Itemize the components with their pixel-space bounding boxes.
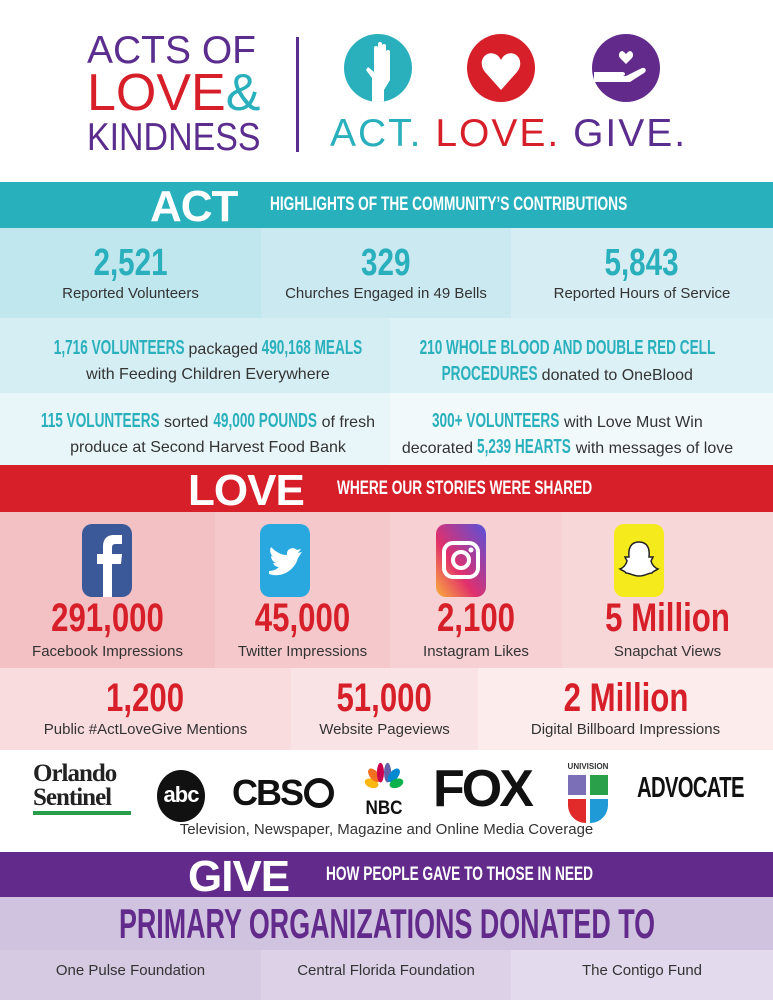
logo: cbs: [232, 772, 334, 813]
divider: [296, 37, 299, 152]
stat: facebook: [0, 512, 215, 668]
GIVE heading: [0, 897, 773, 950]
organizations: [0, 950, 773, 1000]
GIVE bar: HOW PEOPLE GAVE TO THOSE IN NEED: [326, 864, 593, 885]
stat: volunteers: [0, 228, 261, 318]
stat: snapchat: 5 Million: [605, 596, 730, 640]
stat: facebook: Facebook Impressions: [32, 643, 183, 660]
highlight: hearts: [402, 410, 733, 458]
stat: pageviews: Website Pageviews: [319, 721, 450, 738]
highlight: produce: produce at Second Harvest Food Bank: [70, 439, 346, 456]
stat: twitter: Twitter Impressions: [238, 643, 367, 660]
ACT bar: ACT: [150, 182, 237, 231]
highlight: meals: 1,716 VOLUNTEERS: [54, 337, 184, 359]
logo: orlando sentinel: [33, 762, 131, 815]
tagline: ACT. LOVE. GIVE.: [330, 112, 687, 155]
stat: hours: [511, 228, 773, 318]
org: central florida: Central Florida Foundation: [297, 962, 475, 979]
icon: facebook: [82, 524, 132, 597]
highlight: hearts: decorated with messages of love: [402, 440, 733, 457]
LOVE second row: [0, 668, 773, 750]
stat: mentions: [0, 668, 291, 750]
logo: orlando sentinel: Sentinel: [33, 784, 111, 811]
icon: heart (love): [467, 34, 535, 102]
LOVE bar: LOVE: [188, 466, 304, 515]
stat: instagram: [390, 512, 562, 668]
logo: nbc: NBC: [365, 798, 403, 819]
highlight: produce: 49,000 POUNDS: [213, 410, 317, 432]
header logo text: [87, 29, 260, 159]
icon: twitter: [260, 524, 310, 597]
LOVE bar: [0, 465, 773, 512]
media caption: Television, Newspaper, Magazine and Online Media Coverage: [180, 821, 593, 838]
highlight: produce: sorted of fresh: [164, 414, 375, 431]
logo: abc: abc: [164, 782, 198, 807]
stat: instagram: Instagram Likes: [423, 643, 529, 660]
logo: univision: [568, 762, 608, 823]
highlight: blood: PROCEDURES: [442, 363, 538, 385]
icon: hand (act): [344, 34, 412, 102]
icon: snapchat: [614, 524, 664, 597]
social row: [0, 512, 773, 668]
header logo text: LOVE&: [87, 64, 260, 122]
highlight: produce: [41, 410, 375, 456]
highlight: produce: 115 VOLUNTEERS: [41, 410, 160, 432]
logo: cbs: CBS: [232, 772, 302, 813]
stat: hours: 5,843: [605, 242, 679, 284]
stat: mentions: 1,200: [106, 676, 185, 720]
logo: univision: UNIVISION: [568, 762, 608, 771]
org: contigo: [511, 950, 773, 1000]
org: one pulse: [0, 950, 261, 1000]
media logos: [33, 760, 744, 838]
logo: nbc: [364, 762, 404, 819]
stat: billboard: Digital Billboard Impressions: [531, 721, 720, 738]
stat: volunteers: Reported Volunteers: [62, 285, 199, 302]
stat: pageviews: [291, 668, 478, 750]
LOVE bar: WHERE OUR STORIES WERE SHARED: [337, 478, 592, 499]
stat: churches: 329: [361, 242, 411, 284]
highlight: blood: donated to OneBlood: [542, 367, 693, 384]
GIVE bar: [0, 852, 773, 897]
highlight: meals: 490,168 MEALS: [262, 337, 363, 359]
stat: instagram: 2,100: [437, 596, 515, 640]
stat: churches: [261, 228, 511, 318]
stat: twitter: 45,000: [255, 596, 350, 640]
logo: abc: [157, 770, 205, 822]
org: one pulse: One Pulse Foundation: [56, 962, 205, 979]
GIVE heading: PRIMARY ORGANIZATIONS DONATED TO: [119, 900, 655, 947]
ACT highlights: [0, 318, 773, 465]
logo: orlando sentinel: Orlando: [33, 760, 116, 787]
GIVE bar: GIVE: [188, 852, 289, 901]
ACT stats row: [0, 228, 773, 318]
ACT bar: HIGHLIGHTS OF THE COMMUNITY’S CONTRIBUTIONS: [270, 194, 627, 215]
highlight: blood: 210 WHOLE BLOOD AND DOUBLE RED CELL: [420, 337, 715, 359]
stat: snapchat: Snapchat Views: [614, 643, 721, 660]
highlight: hearts: with Love Must Win: [564, 414, 703, 431]
stat: pageviews: 51,000: [337, 676, 432, 720]
icon: giving hand (give): [592, 34, 660, 102]
org: contigo: The Contigo Fund: [582, 962, 702, 979]
stat: twitter: [215, 512, 390, 668]
stat: churches: Churches Engaged in 49 Bells: [285, 285, 487, 302]
highlight: blood: [420, 337, 715, 385]
logo: advocate: ADVOCATE: [637, 772, 744, 804]
stat: volunteers: 2,521: [93, 242, 168, 284]
header logo text: ACTS OF: [87, 29, 256, 72]
highlight: meals: packaged: [189, 341, 258, 358]
logo: fox: FOX: [433, 760, 531, 818]
stat: billboard: 2 Million: [563, 676, 688, 720]
highlight: meals: with Feeding Children Everywhere: [86, 366, 330, 383]
stat: hours: Reported Hours of Service: [554, 285, 730, 302]
highlight: meals: [54, 337, 363, 383]
stat: snapchat: [562, 512, 773, 668]
highlight: hearts: 5,239 HEARTS: [478, 436, 571, 458]
highlight: hearts: 300+ VOLUNTEERS: [432, 410, 560, 432]
header logo text: KINDNESS: [87, 116, 260, 159]
org: central florida: [261, 950, 511, 1000]
stat: facebook: 291,000: [51, 596, 164, 640]
stat: billboard: [478, 668, 773, 750]
ACT bar: [0, 182, 773, 228]
icon: instagram: [436, 524, 486, 597]
stat: mentions: Public #ActLoveGive Mentions: [44, 721, 247, 738]
